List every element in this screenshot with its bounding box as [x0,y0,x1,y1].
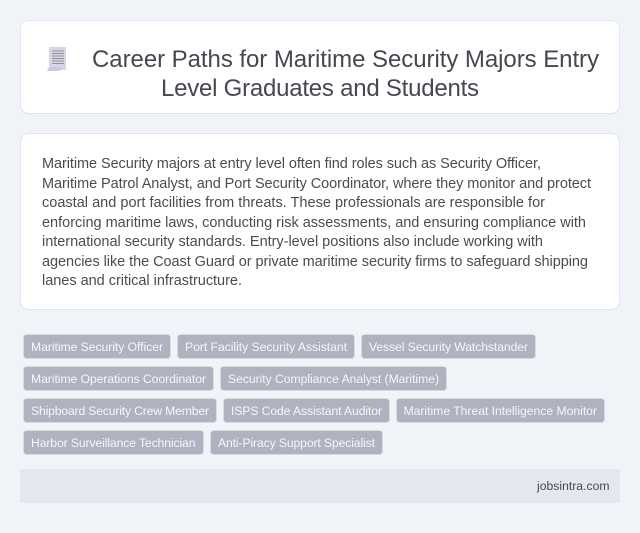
text block: description: coastal and port facilities from threats. These professionals are responsible for [42,195,545,211]
title: Career Paths for Maritime Security Majors Entry [92,46,599,73]
tag: Maritime Threat Intelligence Monitor [404,404,597,418]
tag [224,398,390,422]
tag [24,366,214,390]
tag: Vessel Security Watchstander [369,340,528,354]
tag: Shipboard Security Crew Member [31,404,209,418]
title [92,46,599,102]
panel: header [20,20,620,114]
tag [220,366,446,390]
tag: ISPS Code Assistant Auditor [231,404,382,418]
title: Level Graduates and Students [161,75,479,102]
text block: description: international security standards. Entry-level positions also include working with [42,234,543,250]
tag [362,334,536,358]
tag [178,334,354,358]
text block: description: lanes and critical infrastructure. [42,273,242,289]
footer [20,469,620,503]
footer: jobsintra.com [536,479,610,493]
tag: Maritime Operations Coordinator [31,372,206,386]
tag [210,430,382,454]
tag list: career roles [24,334,604,454]
text block: description: Maritime Security majors at entry level often find roles such as Security Officer, [42,156,541,172]
icon: document scroll [47,47,66,71]
tag: Maritime Security Officer [31,340,163,354]
tag [24,334,170,358]
tag [396,398,604,422]
text block: description: Maritime Patrol Analyst, and Port Security Coordinator, where they monitor and protect [42,176,591,192]
text block: description [42,156,591,289]
text block: description: enforcing maritime laws, conducting risk assessments, and ensuring compliance with [42,215,586,231]
text block: description: agencies like the Coast Guard or private maritime security firms to safeguard shipping [42,254,588,270]
tag [24,398,216,422]
tag: Port Facility Security Assistant [185,340,348,354]
panel: description [20,134,620,310]
tag [24,430,204,454]
tag: Harbor Surveillance Technician [31,436,196,450]
tag: Security Compliance Analyst (Maritime) [228,372,439,386]
tag: Anti-Piracy Support Specialist [218,436,376,450]
